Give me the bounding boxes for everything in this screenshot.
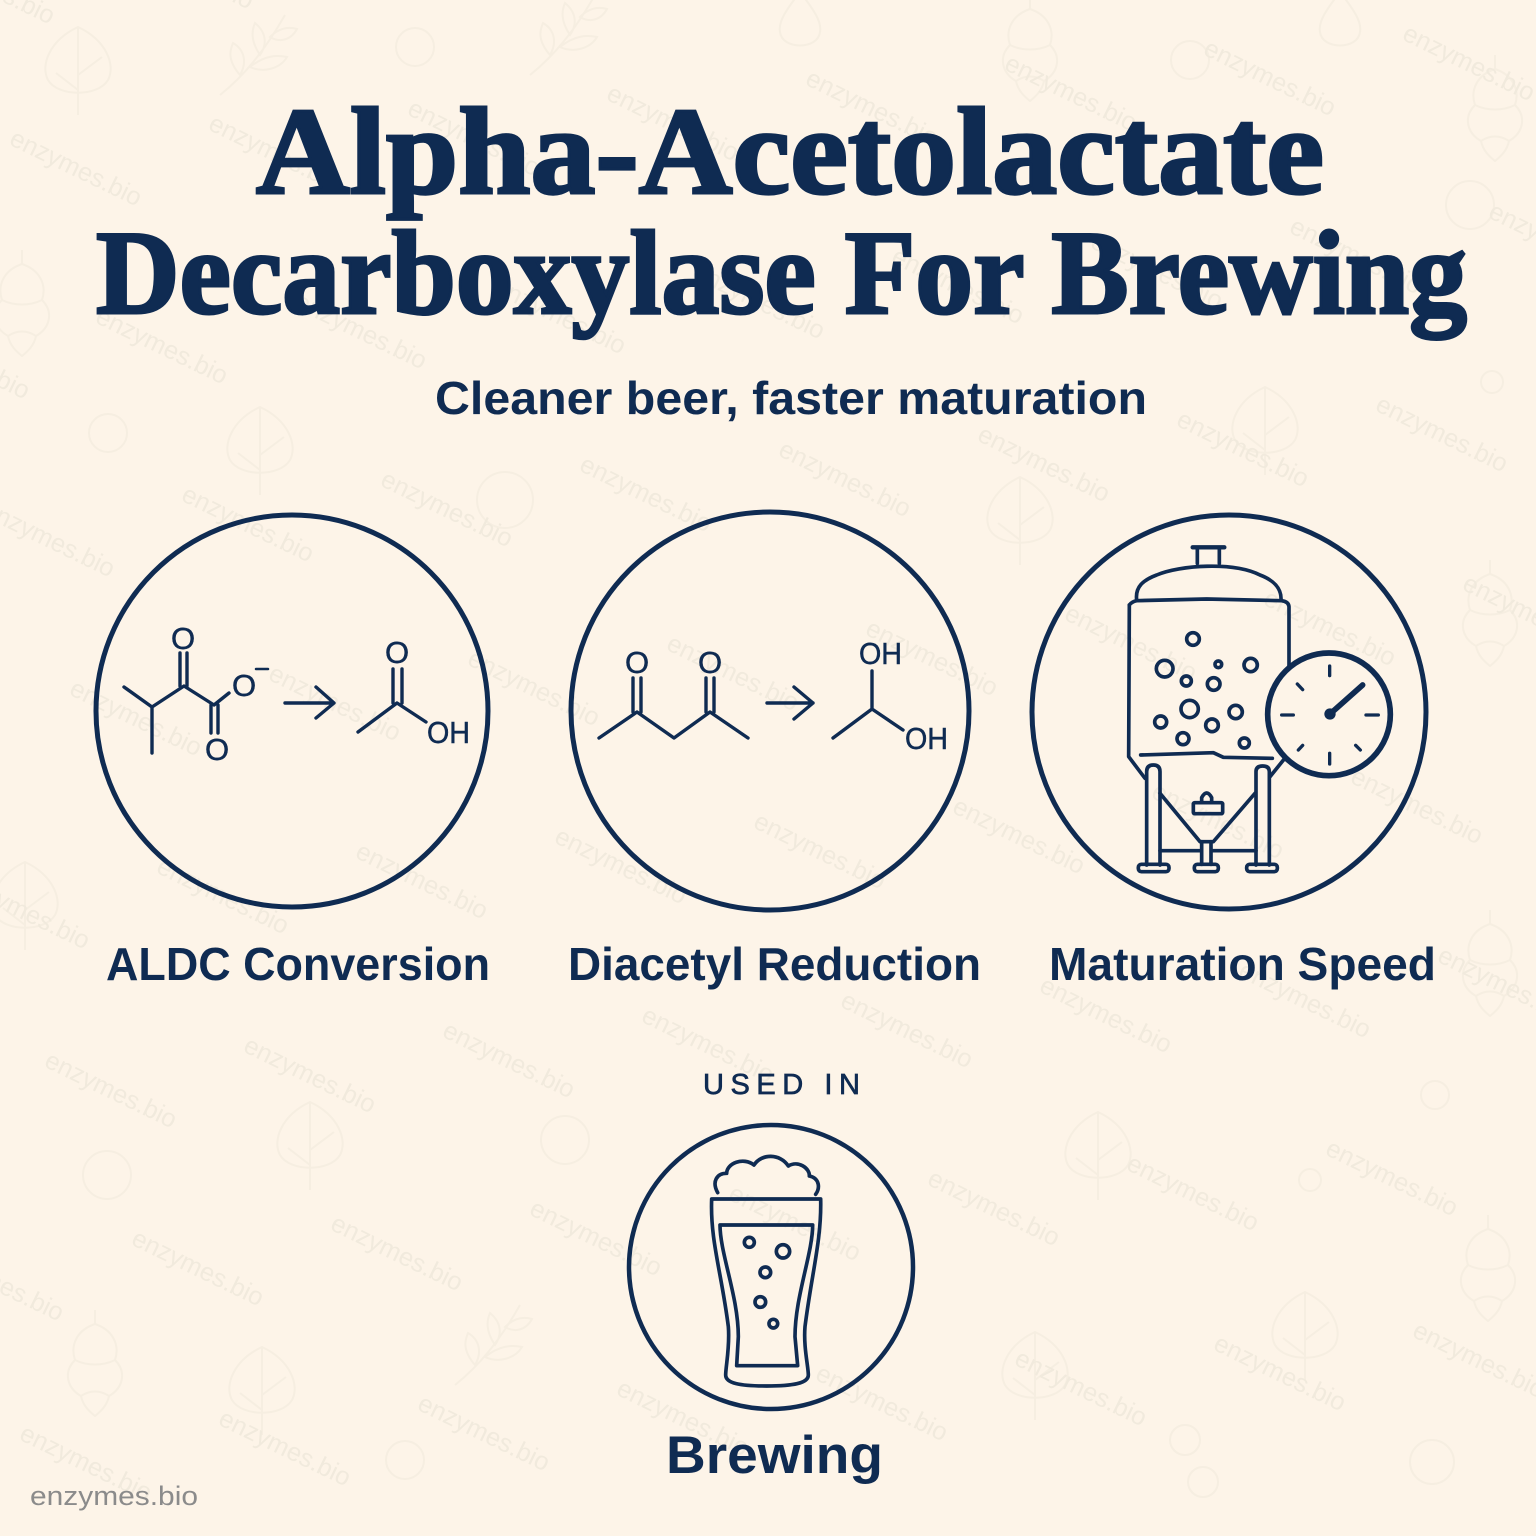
text: enzymes.bio — [1010, 1344, 1151, 1432]
text: enzymes.bio — [662, 629, 803, 717]
label: Maturation Speed: Maturation Speed — [1049, 938, 1436, 990]
text: enzymes.bio — [15, 1419, 156, 1507]
text: enzymes.bio — [239, 1031, 380, 1119]
text: enzymes.bio — [1086, 227, 1227, 315]
text: enzymes.bio — [351, 837, 492, 925]
chemical reaction: alpha-acetolactate to acetic product: O — [385, 635, 409, 670]
text: enzymes.bio — [214, 1404, 355, 1492]
icon: fermentation tank — [1129, 547, 1289, 872]
panel: diacetyl reduction — [568, 512, 981, 990]
text: enzymes.bio — [1000, 49, 1141, 137]
text: enzymes.bio — [602, 79, 743, 167]
chemical reaction: diacetyl to diol: O — [698, 645, 722, 680]
heading: used in: USED IN — [703, 1069, 860, 1101]
label: Diacetyl Reduction: Diacetyl Reduction — [568, 938, 981, 990]
text: enzymes.bio — [413, 1389, 554, 1477]
text: enzymes.bio — [177, 480, 318, 568]
text: enzymes.bio — [438, 1016, 579, 1104]
chemical reaction: diacetyl to diol: O — [625, 645, 649, 680]
icon: clock — [1268, 653, 1390, 776]
chemical reaction: alpha-acetolactate to acetic product: O — [232, 668, 256, 703]
text: enzymes.bio — [5, 124, 146, 212]
text: enzymes.bio — [525, 1194, 666, 1282]
chemical reaction: alpha-acetolactate to acetic product: O — [171, 621, 195, 656]
title: Alpha-Acetolactate — [256, 83, 1324, 220]
text: enzymes.bio — [1321, 1134, 1462, 1222]
text: enzymes.bio — [612, 1374, 753, 1462]
text: enzymes.bio — [1234, 956, 1375, 1044]
chemical reaction: alpha-acetolactate to acetic product: O — [205, 732, 229, 767]
arrow — [767, 687, 813, 719]
text: enzymes.bio — [204, 109, 345, 197]
panel: maturation speed — [1032, 515, 1436, 990]
text: enzymes.bio — [811, 1359, 952, 1447]
chemical reaction: diacetyl to diol: OH — [859, 636, 902, 671]
title: Decarboxylase For Brewing — [96, 206, 1467, 340]
chemical reaction: diacetyl to diol: OH — [905, 721, 948, 756]
circle: brewing — [629, 1125, 913, 1409]
text: enzymes.bio — [489, 272, 630, 360]
text: enzymes.bio — [1346, 762, 1487, 850]
arrow — [285, 687, 334, 718]
text: enzymes.bio — [973, 420, 1114, 508]
text: enzymes.bio — [1122, 1149, 1263, 1237]
text: enzymes.bio — [575, 450, 716, 538]
text: enzymes.bio — [65, 674, 206, 762]
label: Brewing: Brewing — [666, 1426, 883, 1485]
text: enzymes.bio — [923, 1164, 1064, 1252]
text: enzymes.bio — [774, 435, 915, 523]
chemical reaction: alpha-acetolactate to acetic product: OH — [427, 715, 470, 750]
text: enzymes.bio — [1147, 777, 1288, 865]
text: enzymes.bio — [637, 1001, 778, 1089]
text: enzymes.bio — [724, 1179, 865, 1267]
text: enzymes.bio — [463, 644, 604, 732]
text: enzymes.bio — [1035, 971, 1176, 1059]
text: enzymes.bio — [1172, 405, 1313, 493]
text: enzymes.bio — [1259, 584, 1400, 672]
icon: beer glass — [712, 1156, 821, 1386]
text: enzymes.bio — [91, 302, 232, 390]
text: enzymes.bio — [127, 1224, 268, 1312]
text: enzymes.bio — [290, 287, 431, 375]
text: enzymes.bio — [152, 852, 293, 940]
text: enzymes.bio — [1398, 19, 1536, 107]
text: enzymes.bio — [40, 1046, 181, 1134]
chemical reaction: diacetyl to diol — [599, 636, 948, 756]
text: enzymes.bio — [264, 659, 405, 747]
label: ALDC Conversion: ALDC Conversion — [106, 938, 490, 990]
text: enzymes.bio — [861, 614, 1002, 702]
text: enzymes.bio — [1285, 212, 1426, 300]
text: enzymes.bio — [1060, 599, 1201, 687]
text: enzymes.bio — [550, 822, 691, 910]
text: enzymes.bio — [1209, 1329, 1350, 1417]
footer brand: enzymes.bio — [30, 1481, 198, 1511]
text: enzymes.bio — [887, 242, 1028, 330]
subtitle: Cleaner beer, faster maturation — [435, 372, 1147, 424]
circle: diacetyl reduction — [571, 512, 969, 910]
circle: ALDC conversion — [96, 515, 488, 907]
text: enzymes.bio — [1199, 34, 1340, 122]
text: enzymes.bio — [688, 257, 829, 345]
chemical reaction: alpha-acetolactate to acetic product — [124, 621, 470, 767]
text: enzymes.bio — [836, 986, 977, 1074]
text: enzymes.bio — [801, 64, 942, 152]
title — [96, 83, 1467, 340]
panel: brewing — [629, 1125, 913, 1485]
panel: ALDC conversion — [96, 515, 490, 990]
text: enzymes.bio — [749, 807, 890, 895]
text: enzymes.bio — [403, 94, 544, 182]
text: enzymes.bio — [1371, 390, 1512, 478]
circle: maturation speed — [1032, 515, 1426, 909]
text: enzymes.bio — [948, 792, 1089, 880]
text: enzymes.bio — [326, 1209, 467, 1297]
text: enzymes.bio — [376, 465, 517, 553]
